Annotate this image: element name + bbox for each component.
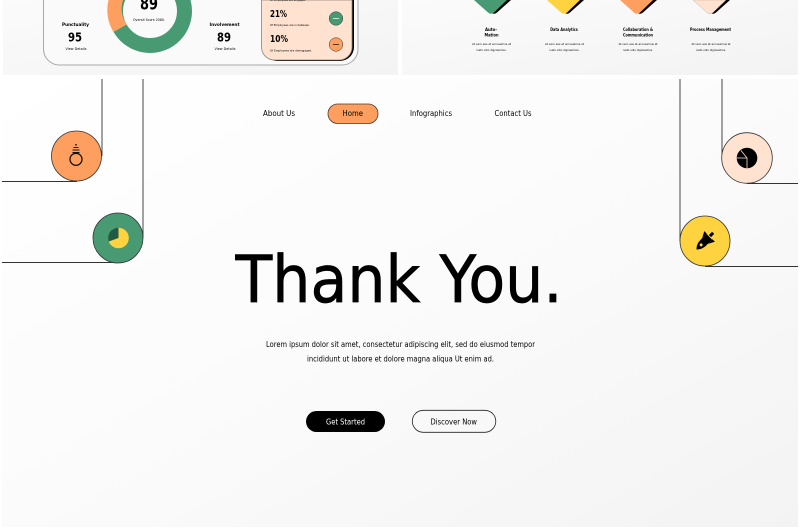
feature: process management: Process Management — [690, 27, 731, 33]
metric: involvement: 89 — [217, 30, 231, 44]
donut chart: overall score: Overall Score 2080. — [133, 18, 165, 22]
stat: 21% — [270, 9, 343, 27]
metric: punctuality: Punctuality — [62, 22, 89, 28]
panel: dashboard preview — [3, 0, 398, 75]
connector with pie node — [722, 79, 798, 184]
feature: collaboration and communication: iusto odio dignissimos. — [623, 48, 653, 52]
feature: data analytics: Data Analytics — [550, 27, 578, 33]
feature: collaboration and communication: Communication — [623, 32, 653, 38]
icon: pie chart — [108, 228, 129, 248]
icon: segmented pie — [737, 148, 757, 168]
stat: 21%: 21% — [270, 9, 287, 20]
metric: involvement: Involvement — [210, 22, 240, 28]
stat: 10% — [270, 34, 343, 52]
navigation — [263, 104, 532, 124]
button: discover now: Discover Now — [430, 418, 477, 426]
feature: automation: iusto odio dignissimos. — [476, 48, 507, 52]
title: Thank You. — [235, 243, 562, 318]
description text — [266, 340, 536, 364]
icon: rocket — [691, 228, 718, 255]
connector with bulb node — [2, 79, 102, 182]
feature: collaboration and communication: At vero eos et accusamus et — [618, 42, 658, 46]
connector with rocket node — [680, 79, 798, 266]
stat: 21%: Of Employees are in between. — [270, 23, 310, 27]
panel: feature cards preview — [402, 0, 798, 75]
feature: data analytics: At vero eos et accusamus et — [545, 42, 585, 46]
feature: process management: iusto odio dignissimos. — [696, 48, 726, 52]
feature: automation: Auto- — [485, 27, 497, 33]
donut chart: overall score — [107, 0, 184, 46]
metric: involvement: View Details — [214, 47, 236, 51]
icon: light bulb — [70, 145, 82, 165]
button: get started: Get Started — [326, 418, 365, 426]
feature: data analytics: iusto odio dignissimos. — [550, 48, 580, 52]
button: get started — [306, 411, 385, 432]
feature: process management — [690, 0, 731, 52]
connector with chart node — [2, 79, 143, 263]
nav item: infographics: Infographics — [410, 109, 452, 118]
metric: involvement — [210, 22, 240, 51]
stat: 10%: Of Employees are disengaged. — [270, 48, 312, 52]
engagement side panel — [262, 0, 354, 61]
nav item: home active — [328, 104, 378, 124]
stat: 10%: 10% — [270, 34, 288, 45]
feature: automation: Mation — [484, 32, 498, 38]
feature: process management: At vero eos et accusamus et — [692, 42, 731, 46]
description text: Lorem ipsum dolor sit amet, consectetur adipiscing elit, sed do eiusmod tempor — [266, 340, 536, 349]
metric: punctuality — [62, 22, 89, 51]
feature: collaboration and communication — [618, 0, 658, 52]
feature: automation: At vero eos et accusamus et — [472, 42, 512, 46]
button: discover now — [412, 410, 496, 432]
nav item: home active: Home — [342, 109, 363, 118]
dashboard card — [44, 0, 358, 65]
feature: collaboration and communication: Collaboration & — [623, 27, 653, 33]
description text: incididunt ut labore et dolore magna aliqua Ut enim ad. — [307, 354, 494, 364]
metric: punctuality: View Details — [66, 47, 87, 51]
feature: data analytics — [545, 0, 585, 52]
nav item: contact us: Contact Us — [494, 109, 532, 118]
metric: punctuality: 95 — [68, 30, 82, 44]
feature: automation — [472, 0, 512, 52]
nav item: about us: About Us — [263, 109, 295, 118]
